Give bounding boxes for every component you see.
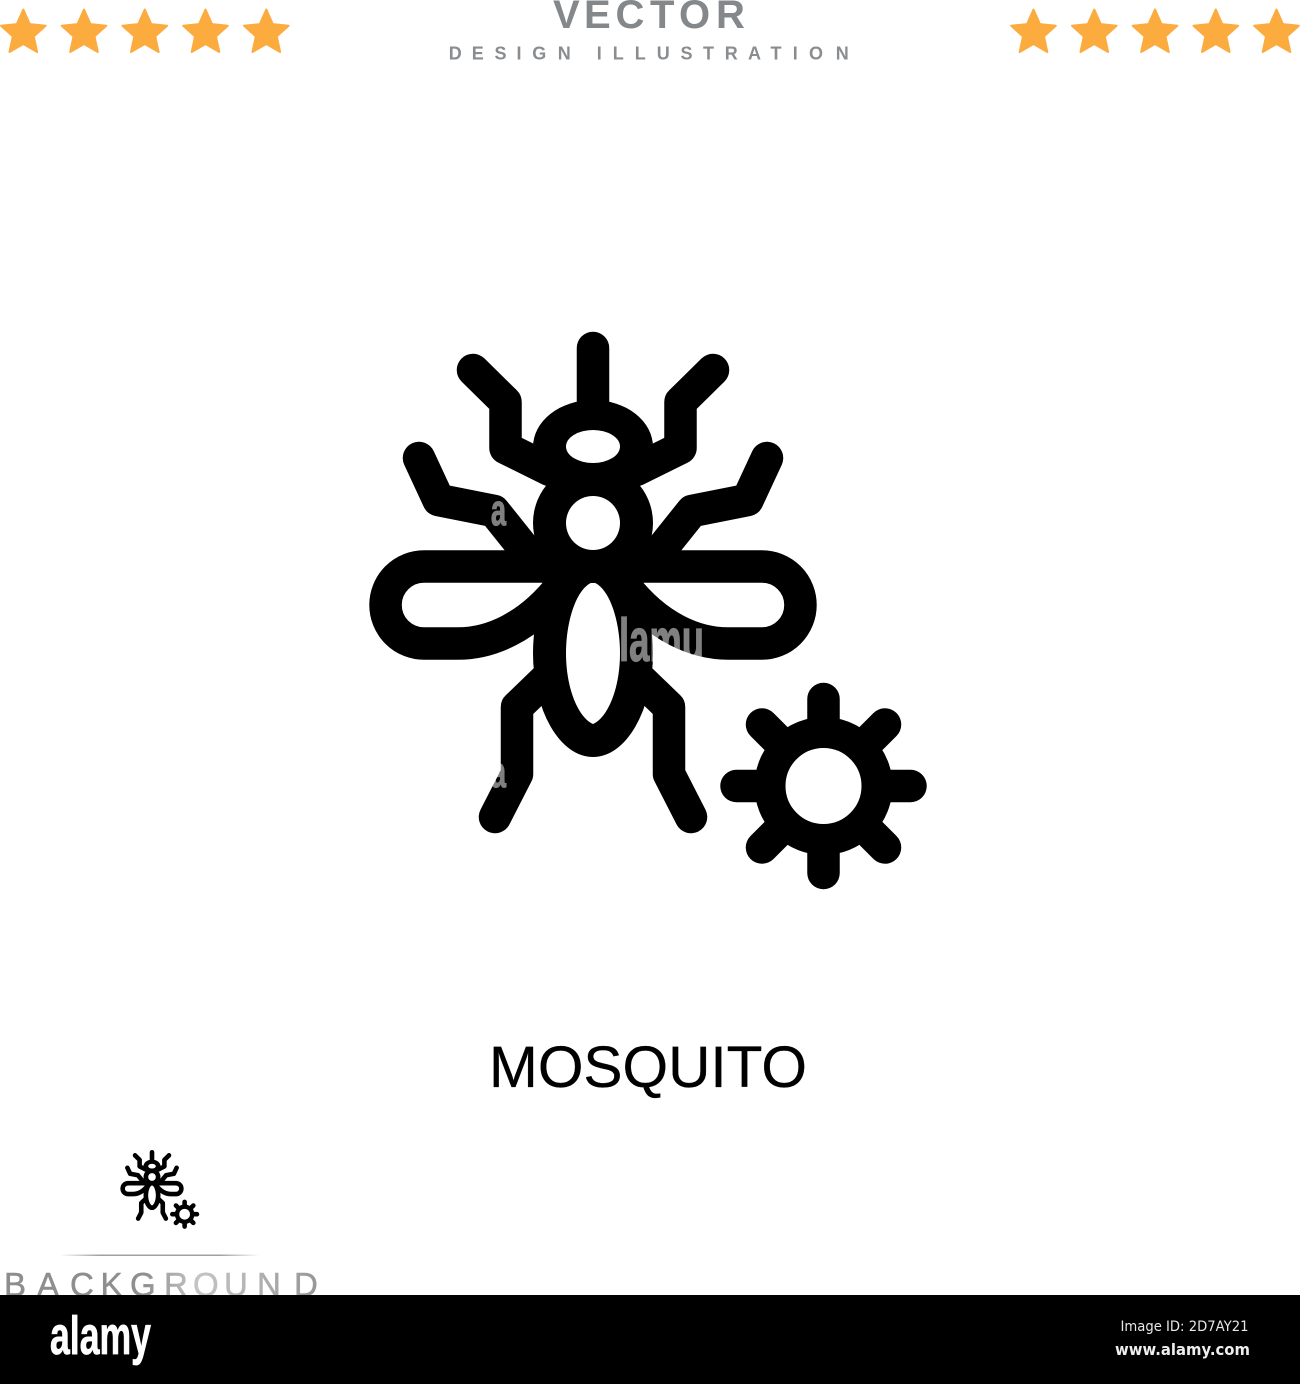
watermark fragments (491, 486, 704, 797)
footer bar (0, 1295, 1300, 1384)
gear (736, 699, 910, 873)
subheading: DESIGN ILLUSTRATION: DESIGN ILLUSTRATION (449, 44, 849, 64)
divider line (60, 1254, 259, 1256)
mosquito wings (386, 566, 800, 644)
label: BACKGROUND: BACKGROUND (4, 1266, 318, 1303)
watermark fragments: a (491, 486, 506, 535)
logo: alamy: alamy (50, 1306, 151, 1366)
mosquito thorax (533, 463, 653, 583)
mosquito abdomen (533, 549, 653, 757)
mosquito head (533, 400, 653, 494)
left star rating (1, 10, 289, 52)
icon: mosquito with gear (386, 348, 910, 873)
website url: www.alamy.com (1115, 1340, 1250, 1359)
watermark fragments: a (491, 748, 506, 797)
title: MOSQUITO: MOSQUITO (489, 1035, 807, 1100)
mosquito legs and antennae (419, 348, 767, 817)
right star rating (1011, 10, 1299, 52)
watermark fragments: lamu (619, 607, 704, 674)
icon: small mosquito with gear (123, 1152, 197, 1227)
image id: Image ID: 2D7AY21 (1120, 1319, 1248, 1335)
